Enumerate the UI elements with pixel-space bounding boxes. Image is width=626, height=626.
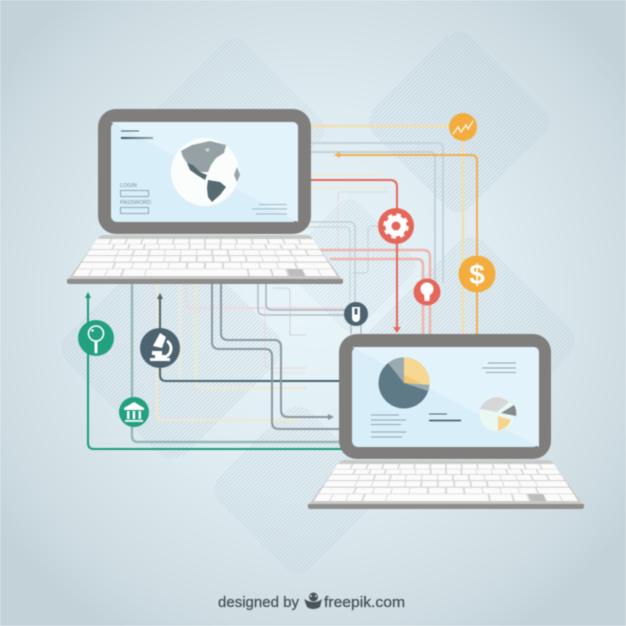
connector: microscope arrow	[160, 296, 345, 381]
bottom keyboard keys	[314, 464, 578, 501]
laptop bottom: keyboard base	[308, 460, 584, 509]
screen text lines	[252, 204, 287, 214]
laptop top: screen frame	[98, 109, 311, 234]
icon: magnifier	[78, 320, 114, 356]
icon: gear	[378, 208, 414, 244]
arrowhead: microscope	[157, 293, 163, 299]
footer credit	[218, 592, 405, 611]
small pie chart	[480, 396, 516, 432]
freepik logo	[304, 592, 322, 609]
laptop top: keyboard base	[67, 235, 343, 284]
icon: dollar: $	[469, 259, 485, 290]
connector: bulb pink lines	[320, 250, 430, 334]
icon: chart	[449, 113, 477, 141]
arrowhead: grey	[328, 414, 334, 420]
login form	[120, 183, 151, 214]
connector: bank line	[132, 284, 345, 442]
icon: test tube	[344, 302, 368, 326]
arrowhead: dollar	[334, 152, 340, 158]
connector: dollar line	[337, 155, 477, 334]
pale connector lines	[157, 143, 443, 420]
footer credit: designed by	[218, 594, 299, 611]
arrowhead: magnifier	[85, 292, 91, 298]
icon: dollar	[458, 256, 496, 292]
connector: gear arrow	[311, 180, 397, 328]
large pie chart	[378, 357, 430, 408]
globe	[171, 138, 240, 206]
icon: microscope	[140, 328, 180, 368]
top keyboard keys	[73, 239, 337, 276]
screen text: heading bars	[121, 130, 153, 139]
login form: LOGIN	[120, 183, 137, 189]
laptop bottom: screen frame	[339, 334, 551, 459]
footer credit: freepik.com	[324, 594, 405, 611]
icon: light bulb	[414, 278, 440, 306]
connector: magnifier arrow	[88, 296, 345, 449]
login form: PASSWORD	[120, 200, 151, 206]
chart text lines	[371, 363, 516, 437]
arrowhead: gear	[393, 327, 401, 333]
hatched diamond backgrounds	[53, 24, 583, 581]
connector: grey lines	[212, 284, 345, 429]
connector: chart line	[311, 126, 463, 334]
icon: bank	[119, 397, 149, 427]
